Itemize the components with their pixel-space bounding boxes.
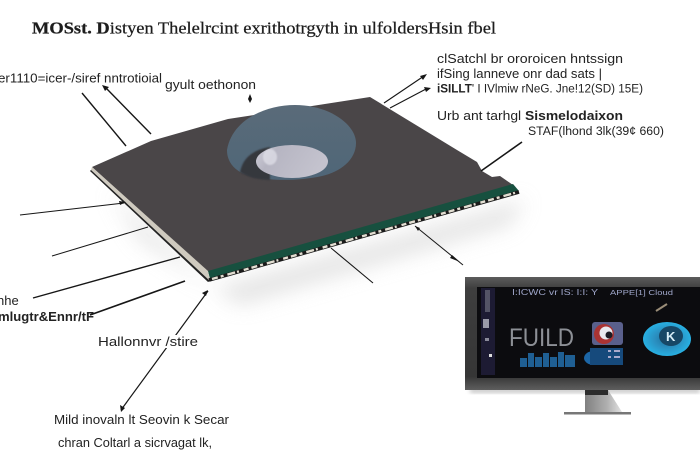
board cast shadow (110, 190, 525, 305)
callout: right label (437, 108, 664, 138)
callout: top left label: er1110=icer-/siref nntrotioial (0, 70, 162, 86)
callout: left label (0, 293, 94, 324)
callout: centre bottom label: Hallonnvr /stire (98, 334, 198, 349)
screen top bar: APPE[1] Cloud (610, 290, 673, 297)
callout: upper right label (437, 51, 643, 96)
arrow: upper right 1 (384, 74, 427, 103)
board left edge (91, 167, 210, 281)
arrow: top left 2 (102, 85, 151, 134)
arrow: top left 1 (82, 93, 126, 146)
arrow: right (481, 142, 522, 171)
arrow: left 1 (20, 201, 126, 215)
monitor stand (564, 390, 631, 414)
arrow: centre down (331, 248, 373, 283)
callout: bottom label: chran Coltarl a sicrvagat lk, (58, 435, 212, 450)
screen bar chart (520, 352, 575, 367)
monitor bezel (465, 277, 700, 390)
callout: bottom label: Mild inovaln lt Seovin k Secar (54, 412, 230, 427)
screen sidebar (481, 288, 495, 375)
screen red app icon (592, 322, 623, 345)
board green edge (208, 184, 519, 279)
screen top bar: I:ICWC vr IS: I:I: Y (512, 288, 599, 297)
arrow: left 4 (90, 281, 185, 315)
screen blue disc icon (643, 322, 691, 356)
arrow: left 3 (33, 257, 180, 298)
monitor shadow (470, 388, 700, 393)
board top surface (92, 97, 513, 272)
dome lens (227, 105, 356, 180)
arrow: left 2 (52, 227, 148, 256)
callout: right label: STAF(lhond 3lk(39¢ 660) (528, 126, 664, 138)
callout: upper right label: clSatchl br ororoicen hntssign (437, 51, 623, 66)
callout: bottom label (54, 412, 230, 450)
callout: upper right label: ifSing lanneve onr dad sats | (437, 66, 602, 81)
monitor screen (477, 287, 700, 378)
circuit board illustration (90, 97, 525, 305)
callout: left label: mlugtr&Ennr/tF (0, 309, 94, 324)
arrow: bottom long (120, 290, 208, 412)
arrow: towards monitor (415, 226, 463, 265)
screen blue cloud widget (584, 348, 623, 365)
arrow: upper right 2 (390, 87, 431, 108)
title: MOSst. D istyen Thelelrcint exrithotrgyth in ulfoldersHsin fbel (32, 18, 496, 38)
screen logo: FUILD (509, 324, 574, 352)
board connector strip (209, 192, 519, 280)
screen blue disc icon: K (666, 329, 676, 344)
monitor (465, 277, 700, 414)
callout: right label: Urb ant tarhgl Sismelodaixon (437, 108, 623, 123)
callout: upper right label: iSILLT' I IVlmiw rNeG. Jne!12(SD) 15E) (437, 84, 643, 96)
screen top bar (512, 288, 673, 297)
arrow: top centre tick (248, 94, 252, 103)
callout: top centre label: gyult oethonon (165, 77, 256, 92)
arrows (20, 74, 522, 412)
screen tick mark (656, 304, 667, 311)
